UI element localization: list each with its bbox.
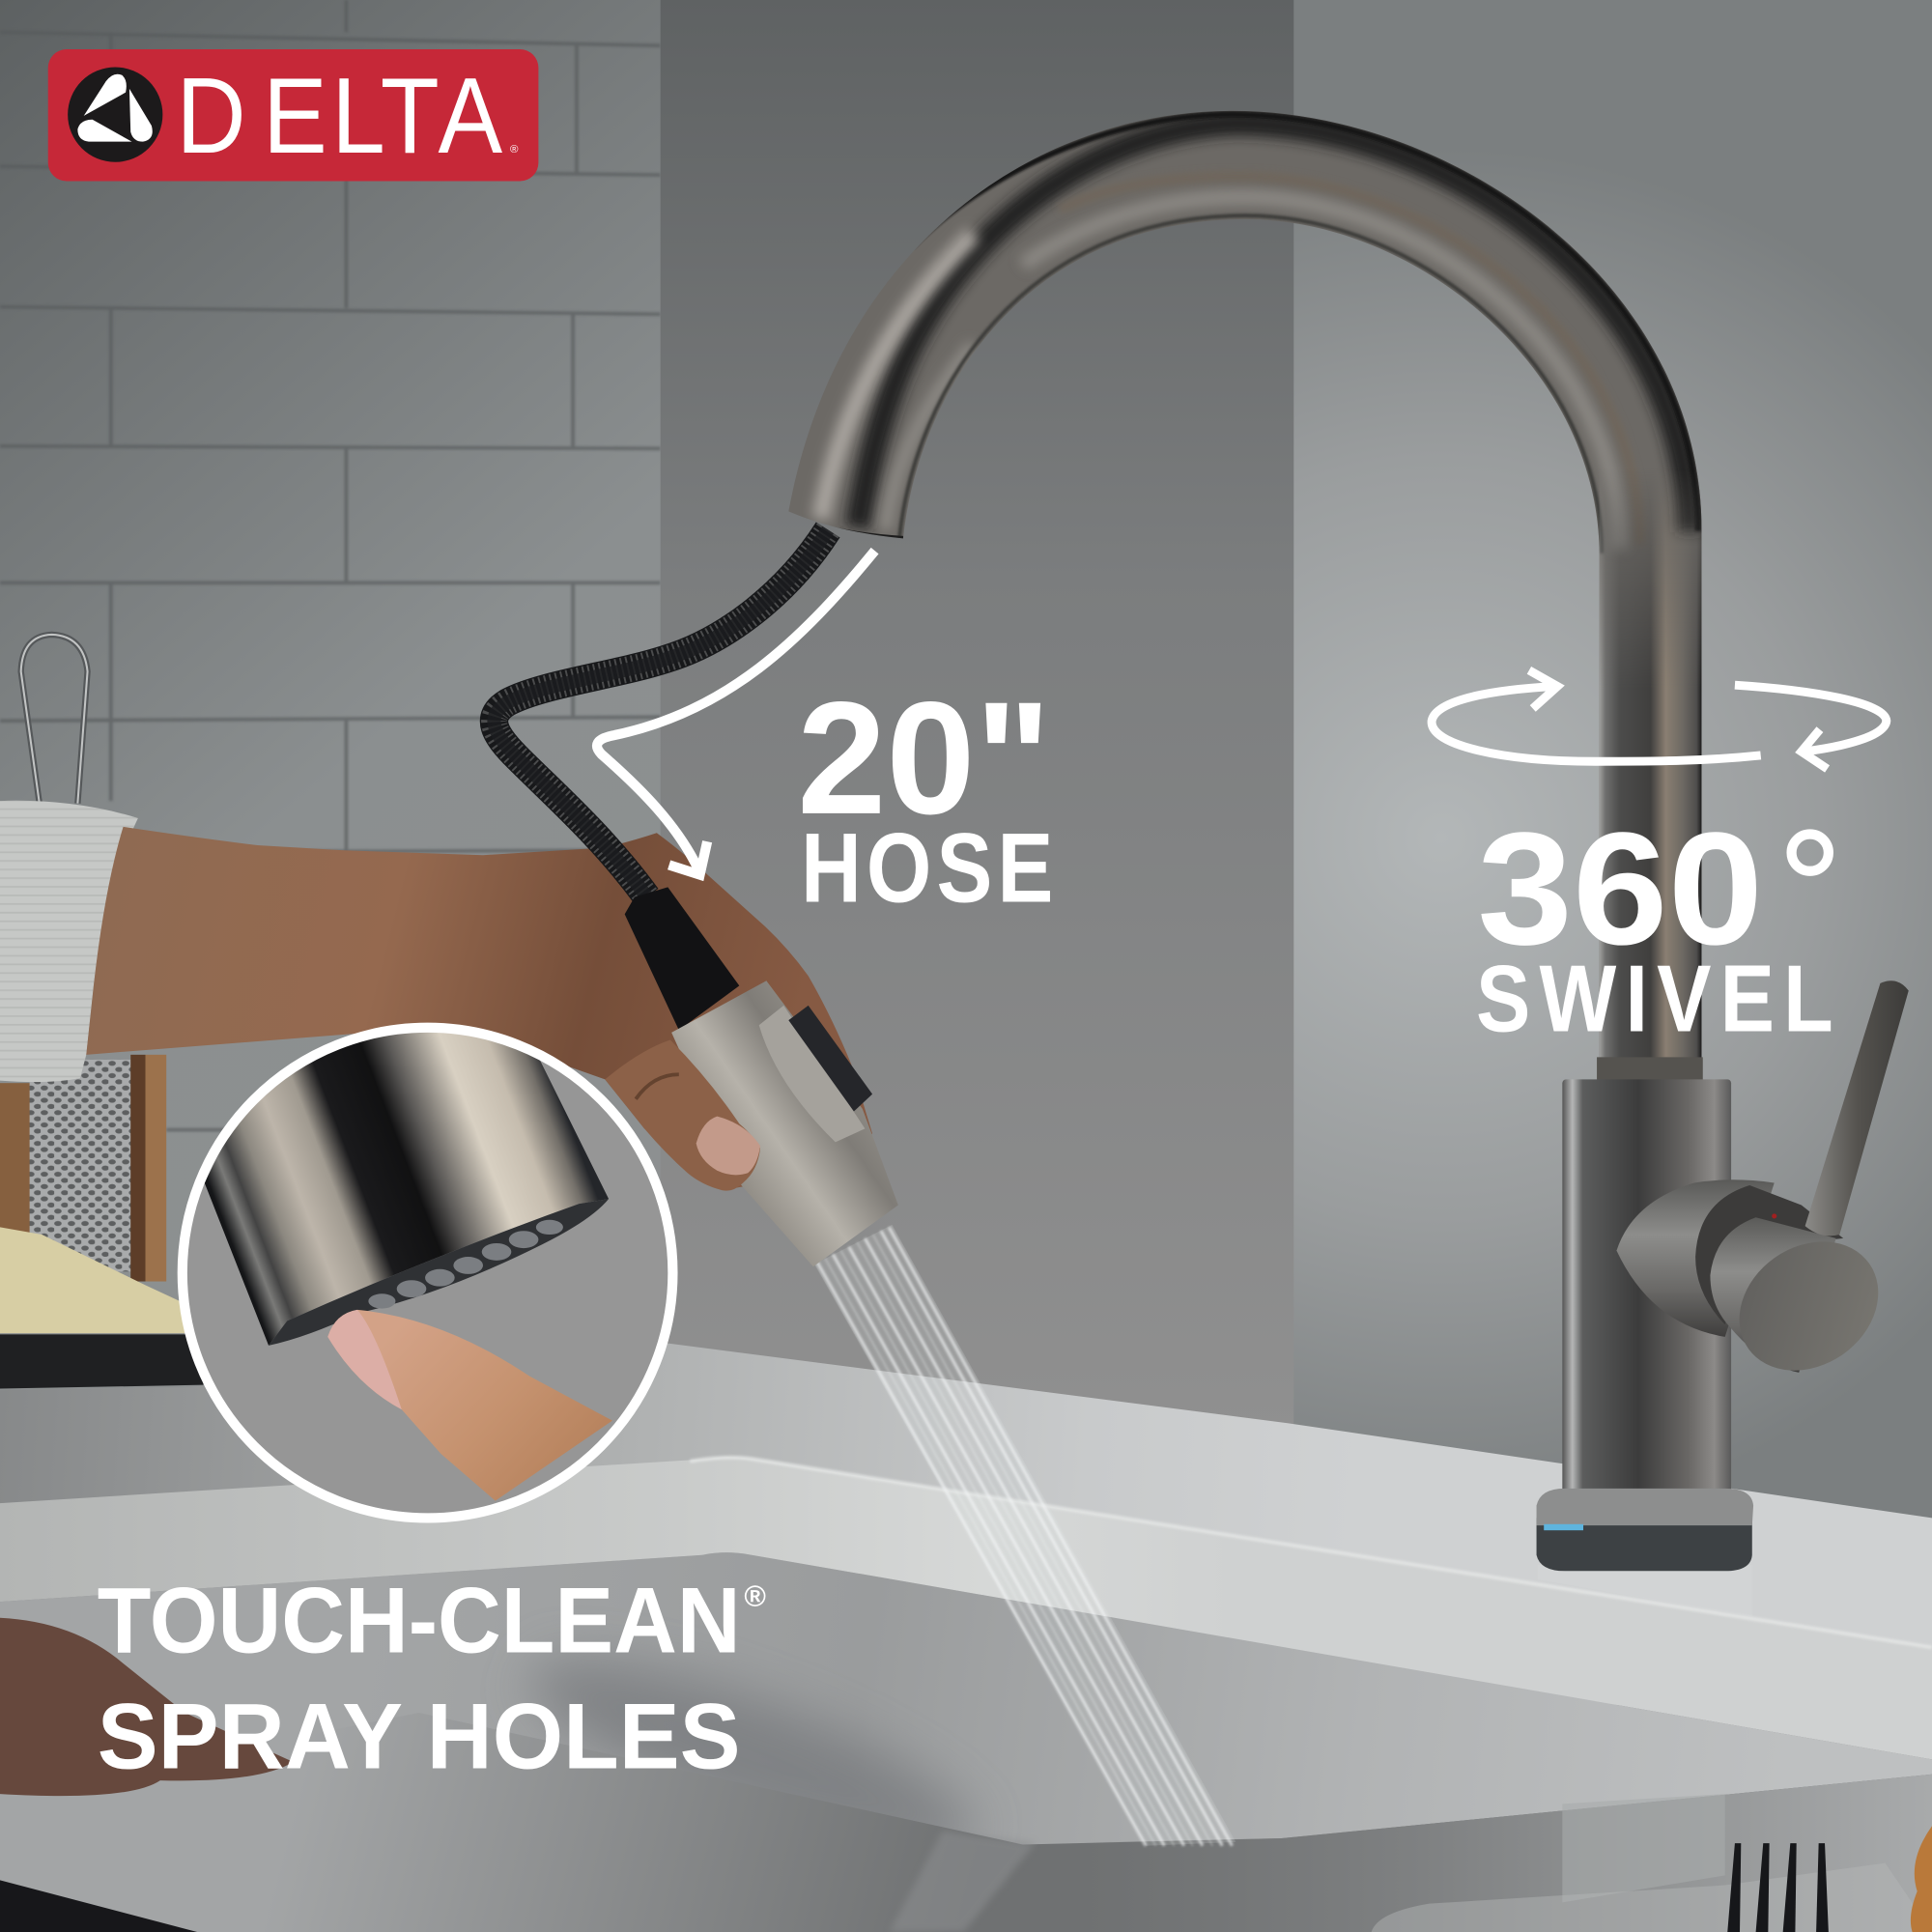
callout: 360 degree swivel: 360 <box>1477 800 1763 979</box>
faucet <box>777 99 1909 1571</box>
faucet reflection on counter <box>1538 1565 1752 1616</box>
callout: 20 inch hose: 20" <box>797 669 1051 848</box>
spout end rim <box>836 527 903 539</box>
water streaks <box>817 1227 1233 1846</box>
water body <box>814 1225 1236 1846</box>
spout brown tone <box>1072 176 1633 487</box>
dark bottom corner <box>0 1880 197 1932</box>
callout: 20 inch hose: HOSE <box>801 813 1053 923</box>
sink rim <box>0 1457 1932 1759</box>
spray holes <box>368 1220 563 1309</box>
basin shadow <box>513 1624 990 1888</box>
callout: 360 degree swivel: SWIVEL <box>1476 947 1833 1052</box>
zoomed spray head <box>205 1010 609 1346</box>
spout inner edge <box>899 215 1602 554</box>
fingertip <box>327 1310 612 1501</box>
arrow: 360 swivel rotation <box>1432 670 1887 769</box>
metal body <box>671 980 898 1266</box>
fingernail <box>327 1310 402 1409</box>
logo: Delta badge <box>48 49 538 181</box>
sprayer head <box>605 887 898 1266</box>
center wall <box>661 0 1296 1441</box>
pasta at right edge <box>1911 1826 1932 1932</box>
counter and sink <box>0 1343 1932 1932</box>
hanging utensil hook <box>21 635 88 804</box>
inset: close-up of touch-clean spray holes <box>182 1010 674 1520</box>
spout left highlight <box>820 234 974 519</box>
front counter right shading <box>1084 1775 1932 1932</box>
clip plate <box>759 1006 865 1142</box>
bowl in foreground <box>1372 1863 1932 1932</box>
callout: 20 inch hose <box>797 669 1053 923</box>
rim highlight <box>690 1458 1932 1647</box>
callout: touch-clean spray holes: TOUCH-CLEAN <box>98 1567 741 1672</box>
glass reflection <box>1562 1794 1725 1902</box>
water spray <box>814 1225 1236 1846</box>
hose <box>494 529 828 897</box>
callout: touch-clean spray holes <box>98 1567 766 1788</box>
base ring <box>1537 1489 1753 1571</box>
inset ring <box>183 1028 672 1518</box>
hand holding sprayer <box>86 827 872 1190</box>
grater <box>30 1060 133 1271</box>
handle <box>1616 980 1909 1397</box>
right wall <box>1293 0 1932 1552</box>
spray face <box>269 1199 609 1346</box>
fork in foreground <box>1727 1843 1829 1932</box>
background kitchen items <box>0 635 203 1389</box>
vertical neck <box>1600 469 1701 1072</box>
water reflection <box>890 1831 1035 1932</box>
arrow: hose extension <box>597 551 875 875</box>
wooden board right <box>130 1055 166 1282</box>
spout lower light <box>885 345 974 529</box>
tiled wall <box>0 0 663 1405</box>
wordmark: DELTA <box>177 56 503 176</box>
lever <box>1805 980 1909 1236</box>
countertop <box>0 1343 1932 1725</box>
button <box>788 1006 872 1112</box>
plate <box>0 1334 203 1389</box>
wooden board <box>0 1083 31 1237</box>
spout dark band <box>858 124 1690 532</box>
body <box>1562 1079 1731 1501</box>
forearm sleeve <box>0 801 138 1082</box>
callout: 360 degree swivel <box>1476 800 1833 1052</box>
callout: touch-clean spray holes: SPRAY HOLES <box>98 1683 741 1788</box>
thumb crease <box>636 1074 679 1099</box>
callout: touch-clean spray holes: ® <box>744 1580 766 1613</box>
food <box>0 1227 185 1333</box>
hand at bottom left <box>0 1618 294 1796</box>
thumb <box>605 1040 760 1191</box>
spout inner light <box>1023 197 1620 550</box>
arched spout <box>777 99 1713 1084</box>
sink basin <box>0 1552 1932 1932</box>
icon: Delta triangle mark <box>68 68 162 162</box>
connector <box>625 887 739 1030</box>
front counter surface <box>0 1713 1932 1932</box>
thumb nail <box>696 1117 760 1175</box>
registered mark: ® <box>510 144 519 156</box>
collar <box>1597 1057 1703 1082</box>
degree symbol <box>1792 835 1829 871</box>
spout edge line <box>912 115 1698 531</box>
